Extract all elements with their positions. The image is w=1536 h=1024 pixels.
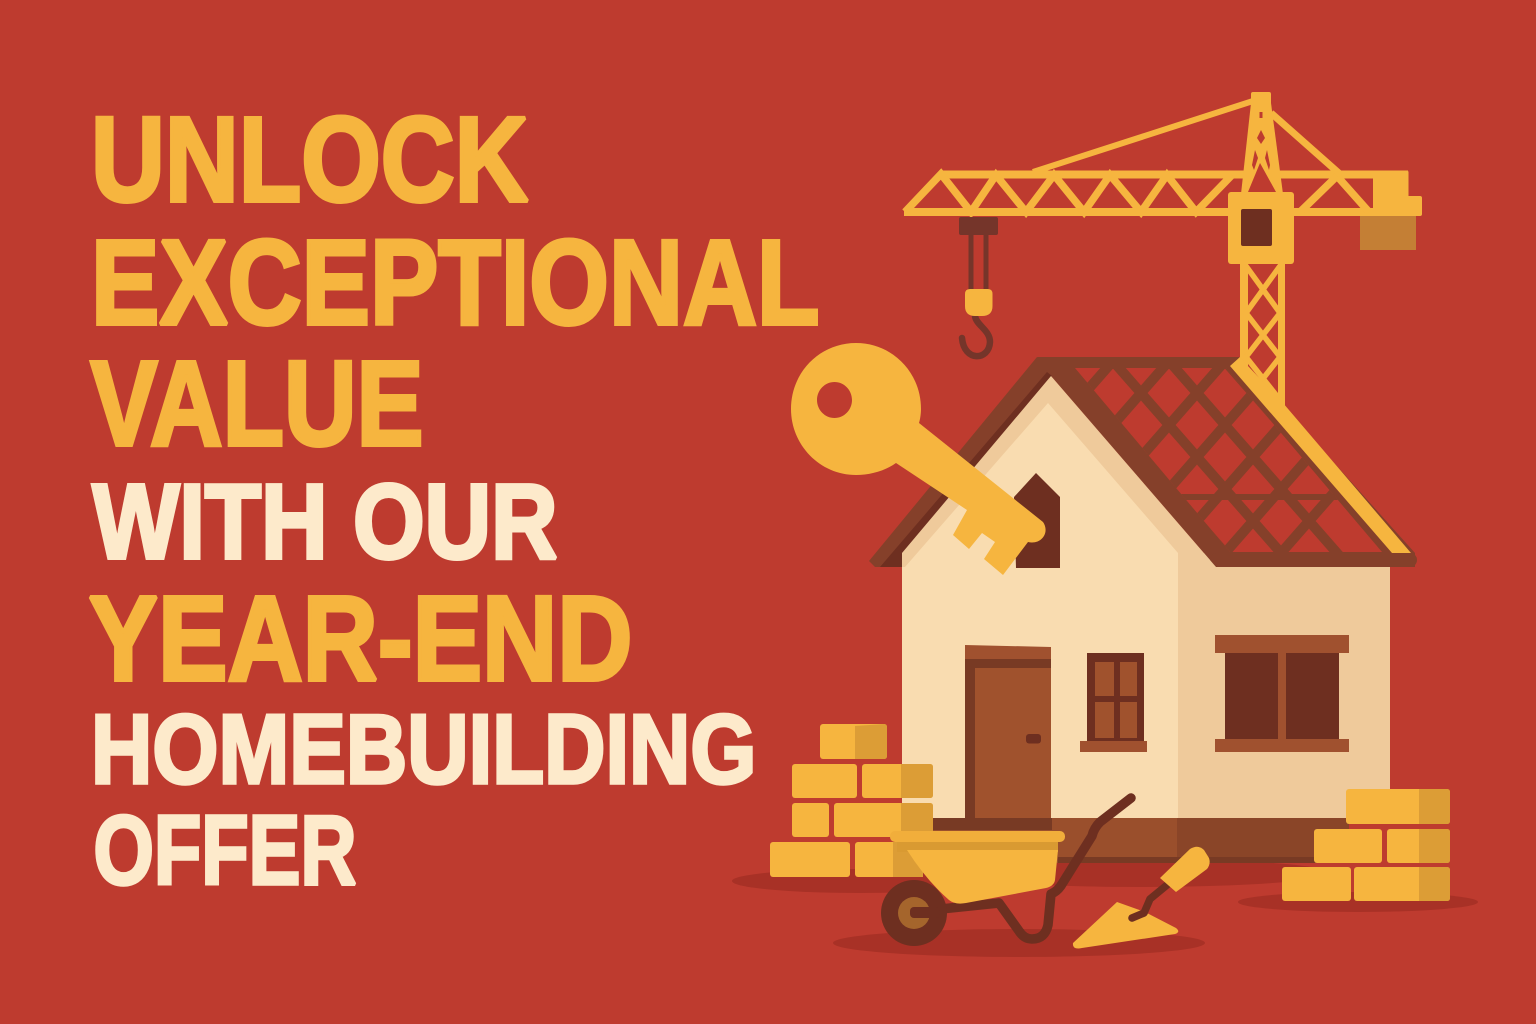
gold roof edge: [1230, 357, 1411, 553]
trowel neck: [1132, 885, 1167, 918]
brick: [792, 803, 829, 837]
roof lattice: [1075, 368, 1382, 552]
house foundation: [930, 818, 1349, 863]
brick: [770, 842, 850, 877]
brick: [792, 764, 857, 798]
brick: [1354, 867, 1450, 901]
brick: [1282, 867, 1351, 901]
tower crane: [904, 92, 1422, 406]
crane jib truss: [904, 101, 1420, 212]
brick: [820, 724, 887, 759]
door: [965, 645, 1051, 830]
headline: [88, 91, 820, 905]
right wall: [1176, 553, 1390, 821]
crane tower head: [1241, 92, 1283, 194]
front wall: [902, 376, 1216, 818]
headline line: HOMEBUILDING: HOMEBUILDING: [91, 694, 756, 804]
house: [869, 357, 1435, 863]
left roof slope: [869, 357, 1052, 567]
ground shadows: [732, 859, 1478, 957]
trowel handle: [1160, 847, 1210, 892]
crane mast: [1240, 264, 1285, 406]
trowel: [1073, 847, 1210, 948]
wheelbarrow: [881, 798, 1131, 946]
headline line: WITH OUR: WITH OUR: [92, 463, 558, 581]
brick: [1314, 829, 1382, 863]
headline line: OFFER: OFFER: [94, 795, 356, 905]
brick: [834, 803, 933, 837]
brick: [1387, 829, 1450, 863]
headline line: YEAR-END: YEAR-END: [88, 570, 632, 706]
small window: [1080, 653, 1147, 752]
headline line: VALUE: VALUE: [90, 335, 424, 471]
large window: [1215, 635, 1349, 752]
key: [791, 343, 1046, 575]
wheel: [881, 880, 947, 946]
brick: [862, 764, 933, 798]
crane counterweight: [1360, 171, 1422, 250]
roof eave: [1210, 553, 1417, 567]
right brick stack: [1282, 789, 1450, 901]
wheelbarrow frame: [912, 798, 1131, 939]
headline line: EXCEPTIONAL: EXCEPTIONAL: [91, 214, 820, 350]
crane cab: [1228, 192, 1294, 264]
left brick stack: [770, 724, 933, 877]
tray: [890, 831, 1065, 904]
crane hook: [959, 217, 998, 356]
attic opening: [1014, 473, 1060, 568]
roof: [869, 357, 1417, 567]
brick: [1346, 789, 1450, 824]
brick: [855, 842, 905, 877]
headline line: UNLOCK: UNLOCK: [91, 91, 528, 227]
trowel blade: [1073, 902, 1178, 948]
